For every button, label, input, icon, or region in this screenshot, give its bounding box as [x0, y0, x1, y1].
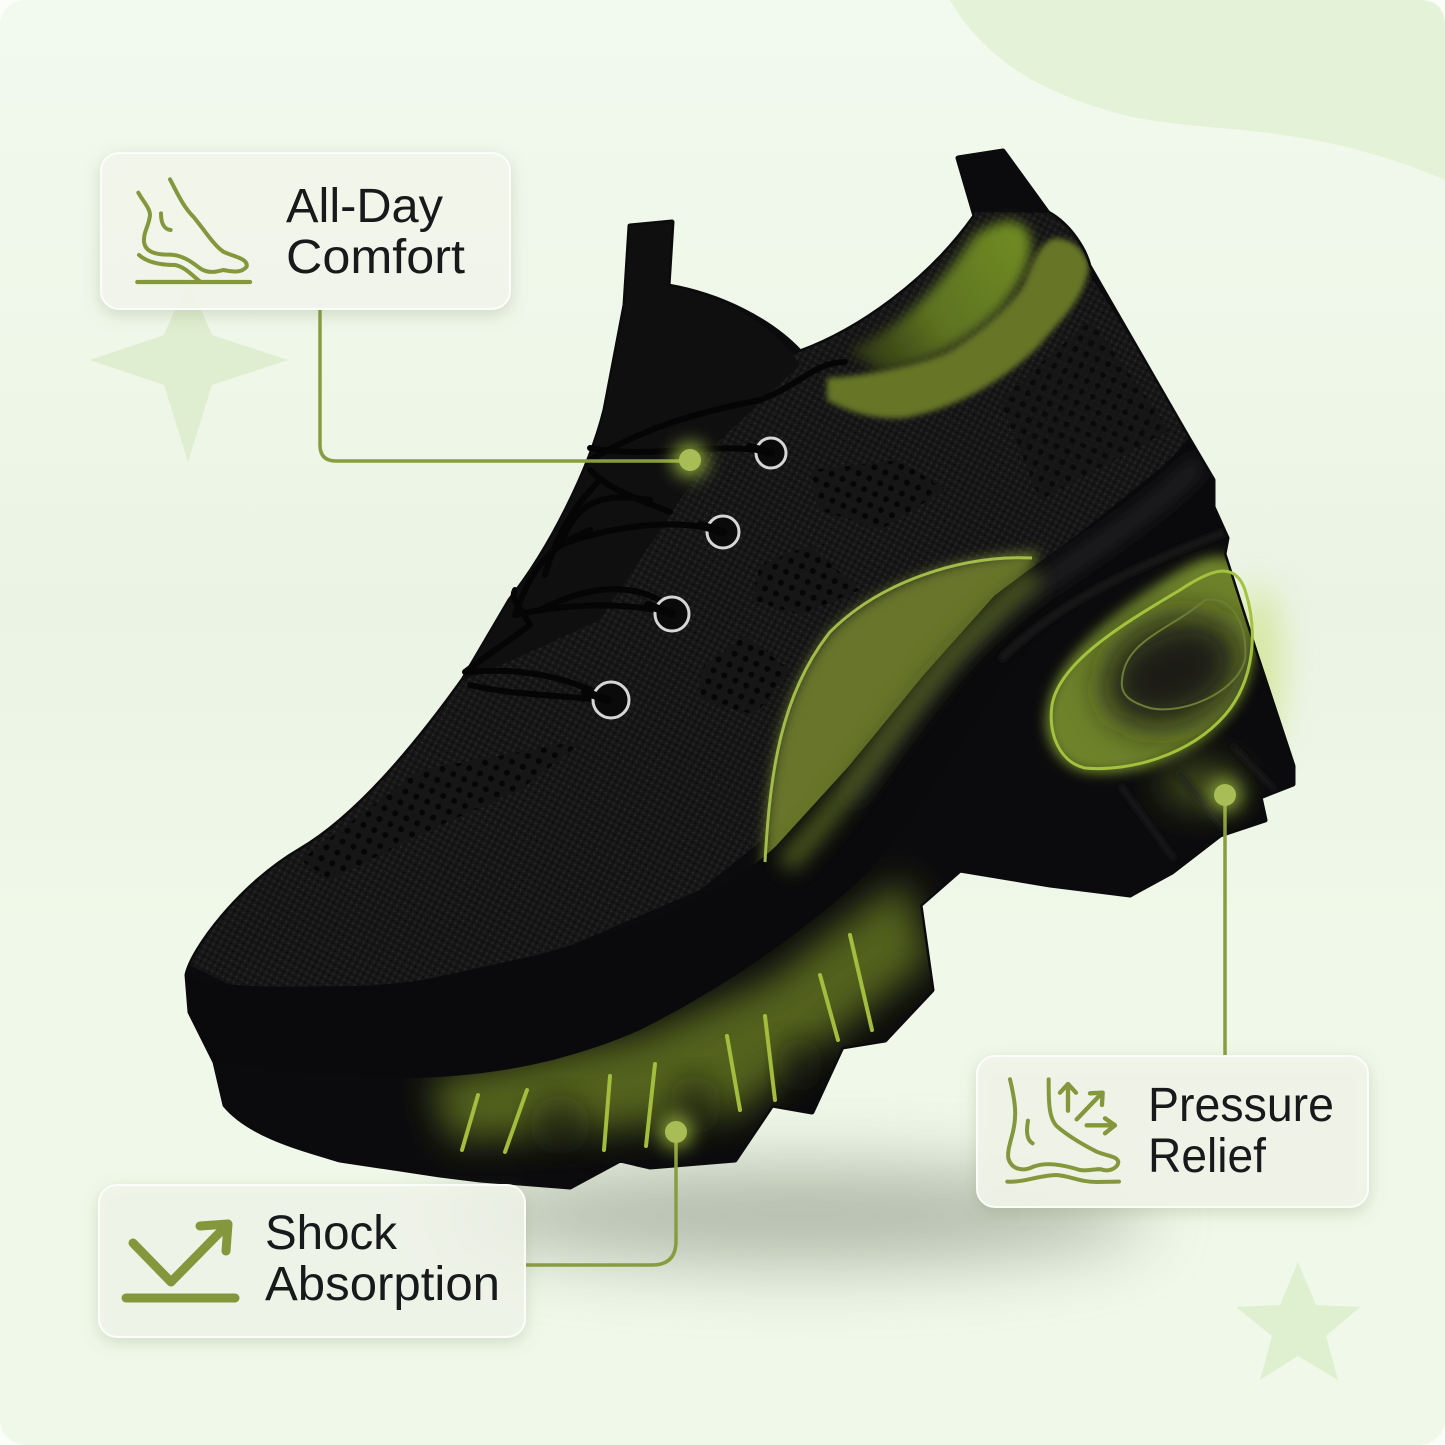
tread dark patches	[530, 1037, 822, 1155]
band olive bleed	[785, 575, 1035, 865]
decorative four-point star	[90, 280, 288, 462]
connector: Pressure Relief	[1208, 778, 1242, 1056]
shoe	[185, 151, 1293, 1187]
panel: Pressure Relief	[977, 1056, 1368, 1207]
knit vent panels	[300, 740, 585, 880]
heel dark centre	[1085, 594, 1259, 750]
decorative five-point star	[1236, 1262, 1360, 1380]
midsole highlight	[850, 462, 1200, 800]
label: Pressure Relief: Pressure	[1148, 1079, 1334, 1132]
side panel outline	[765, 558, 1032, 862]
panel: Shock Absorption	[99, 1185, 525, 1337]
label: Pressure Relief: Relief	[1148, 1130, 1267, 1183]
marker dot	[665, 1121, 687, 1143]
heel tread glow	[1160, 763, 1240, 807]
shoe base silhouette	[187, 151, 1293, 1187]
heel tread lugs	[1120, 745, 1275, 860]
label: Shock Absorption: Shock	[265, 1207, 398, 1260]
heel lining glow	[850, 221, 1031, 372]
collar cushion	[827, 238, 1089, 418]
side cushion panel	[762, 552, 1040, 880]
label: All-Day Comfort: All-Day	[286, 180, 443, 233]
icon: shock absorption arrow	[126, 1224, 235, 1298]
panel: All-Day Comfort	[101, 153, 510, 309]
background blob	[950, 0, 1445, 180]
label: Pressure Relief	[1148, 1079, 1334, 1183]
marker dot	[679, 449, 701, 471]
heel green	[1046, 556, 1256, 773]
heel inner pod	[1122, 600, 1245, 709]
tread ribs	[462, 935, 872, 1152]
rim seam	[1000, 532, 1225, 660]
eyelets	[593, 438, 786, 718]
marker dot	[1214, 784, 1236, 806]
label: Shock Absorption: Absorption	[265, 1258, 500, 1311]
knit upper	[190, 212, 1195, 990]
shoe ground shadow	[450, 1167, 1150, 1263]
connector: Shock Absorption	[526, 1115, 693, 1265]
marker dot glow	[659, 1115, 693, 1149]
tread green haze	[430, 880, 930, 1140]
marker dot glow	[673, 443, 707, 477]
connector: All-Day Comfort	[320, 309, 707, 477]
label: All-Day Comfort: Comfort	[286, 231, 465, 284]
icon: foot on insole	[137, 179, 250, 282]
eyelet lace overlaps	[585, 447, 771, 700]
tongue	[464, 355, 800, 679]
icon: foot with pressure arrows	[1007, 1079, 1119, 1182]
label: All-Day Comfort	[286, 180, 465, 284]
label: Shock Absorption	[265, 1207, 500, 1311]
marker dot glow	[1208, 778, 1242, 812]
heel outer glow	[1236, 585, 1280, 755]
laces	[465, 362, 845, 700]
midsole band	[185, 436, 1227, 1078]
heel pod outline	[1051, 571, 1252, 769]
